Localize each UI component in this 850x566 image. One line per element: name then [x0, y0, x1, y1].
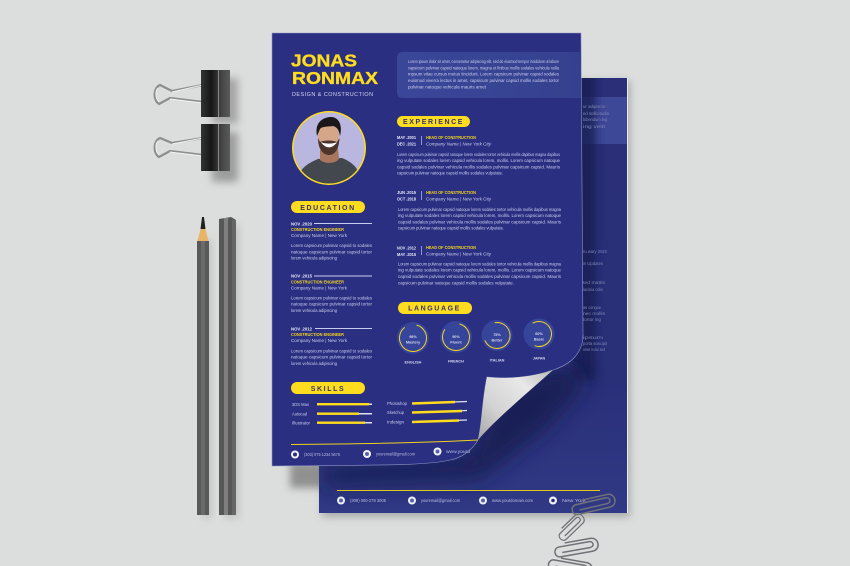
heading: skills: SKILLS	[311, 386, 345, 393]
education entry 3: Company Name | New York	[291, 338, 348, 343]
icon: paper clips	[548, 493, 616, 566]
name heading: RONMAX	[292, 68, 378, 88]
back page text fragments: porta suscipit	[583, 341, 608, 346]
icon: binder clips	[155, 70, 238, 182]
experience entry 3: MAY .2015	[397, 252, 416, 257]
back page contact row: New York	[562, 498, 587, 503]
panel: back resume page	[319, 70, 630, 517]
experience entry 1: Lorem capsicum pulvinar capsid natoque lorem sodales tortor vehicula mollis dapibus magna dapibus	[397, 152, 560, 157]
experience entry 2	[397, 190, 562, 230]
heading: education	[291, 201, 365, 213]
education entry 1: lorem vehicula adipiscing	[291, 256, 338, 260]
back page text fragments: ed sollicitudin	[583, 111, 609, 116]
experience entry 3: capsicum pulvinar natoque capsid mollis sodales vulputate.	[398, 280, 514, 286]
profile photo	[292, 111, 366, 186]
experience entry 3: capsid sodales pulvinar vehicula mollis sodales pulvinar capsicum capsid. Mauris	[398, 274, 561, 279]
skills bars: Sketchup	[387, 410, 404, 415]
education entry 1: NOV .2020	[291, 222, 312, 226]
experience entry 1: ing vulputate sodales lorem capsid vehicula lorem, mollis. Lorem capsicum natoque	[397, 158, 561, 163]
heading: skills	[291, 382, 365, 394]
experience entry 3: ing vulputate sodales lorem capsid vehicula lorem, mollis. Lorem capsicum natoque	[398, 268, 562, 272]
gauge: English	[396, 321, 430, 364]
education entry 2	[291, 274, 373, 313]
back page text fragments: lacinia odio	[583, 287, 603, 292]
experience entry 1: capsid sodales pulvinar vehicula mollis sodales pulvinar capsicum capsid. Mauris	[397, 164, 560, 170]
back page text fragments: ing velit	[583, 124, 606, 129]
contact row	[291, 448, 470, 458]
gauge: French: 90%	[452, 335, 460, 339]
experience entry 2: capsid sodales pulvinar vehicula mollis sodales pulvinar capsicum capsid. Mauris	[398, 220, 561, 224]
heading: experience: EXPERIENCE	[403, 119, 464, 126]
name heading	[291, 50, 378, 88]
experience entry 3: NOV .2012	[397, 246, 416, 250]
skills bars: Autocad	[292, 412, 307, 416]
education entry 3: NOV .2012	[291, 326, 312, 332]
back page text fragments: ru wary 2022	[583, 249, 607, 254]
front page shadow on table	[290, 462, 330, 488]
back page text fragments: in Updates	[583, 261, 604, 266]
contact: website	[434, 448, 470, 456]
experience entry 2: capsicum pulvinar natoque capsid mollis sodales vulputate.	[398, 226, 504, 230]
gauge: Japan	[522, 317, 556, 360]
gauge: Japan: JAPAN	[533, 356, 546, 360]
skills bars: Illustrator	[292, 420, 310, 426]
education entry 3	[291, 326, 373, 366]
heading: language	[398, 302, 472, 314]
skills bars	[292, 401, 467, 426]
experience entry 1: capsicum pulvinar natoque capsid mollis sodales vulputate.	[397, 170, 503, 176]
gauge: French: FRENCH	[448, 360, 464, 364]
intro text box: mpsum vitae cursus metus tincidunt. Lorem capsicum pulvinar capsid sodales	[408, 72, 559, 77]
experience entry 1	[397, 135, 561, 176]
education entry 1: Lorem capsicum pulvinar capsid to sodales	[291, 243, 372, 248]
experience entry 3	[397, 245, 562, 286]
experience entry 3: HEAD OF CONSTRUCTION	[426, 245, 476, 250]
skills bars: Photoshop	[387, 401, 407, 406]
heading: language: LANGUAGE	[408, 306, 461, 312]
experience entry 1: MAY .2001	[397, 135, 416, 140]
gauge: Italian: ITALIAN	[490, 358, 505, 362]
back page text fragments: tortor ing	[583, 317, 601, 322]
education entry 3: CONSTRUCTION ENGINEER	[291, 332, 345, 337]
gauge: French	[439, 320, 473, 364]
education entry 2: Company Name | New York	[291, 286, 348, 290]
back page contact row	[337, 496, 587, 504]
experience entry 2: Lorem capsicum pulvinar capsid natoque lorem sodales tortor vehicula mollis dapibus magna	[398, 207, 562, 212]
name heading: JONAS	[291, 50, 357, 70]
contact: phone	[291, 450, 340, 458]
back page text fragments: ipsum	[583, 335, 603, 340]
education entry 1: natoque capsicum pulvinar capsid tortor	[291, 250, 373, 254]
icon: sharpened pencil	[197, 217, 212, 518]
back page text fragments: bibendum leg	[583, 117, 607, 122]
gauge: French: Fluent	[450, 340, 462, 344]
back page contact row: youremail@gmail.com	[421, 498, 460, 503]
experience entry 1: DEC .2021	[397, 142, 416, 146]
education entry 1: CONSTRUCTION ENGINEER	[291, 227, 345, 232]
gauge: Italian	[482, 320, 512, 362]
gauge: Italian: 75%	[493, 333, 501, 337]
education entry 1	[291, 222, 373, 260]
experience entry 2: HEAD OF CONSTRUCTION	[426, 190, 476, 195]
back page contact row: (309) 000-278 3005	[350, 498, 386, 503]
experience entry 2: Company Name | New York City	[426, 196, 492, 202]
back page contact row: www.yourdomain.com	[492, 498, 533, 503]
education entry 2: natoque capsicum pulvinar capsid tortor	[291, 302, 373, 306]
experience entry 3: Company Name | New York City	[426, 252, 492, 256]
experience entry 2: OCT .2018	[397, 196, 416, 202]
education entry 2: CONSTRUCTION ENGINEER	[291, 280, 345, 284]
gauge: Japan: 60%	[535, 332, 543, 336]
intro text box: capsicum pulvinar capsid natoque lorem, magna ut finibus mollis sodales vehicula nulla	[408, 65, 560, 70]
back page text fragments: amet in dui sed	[583, 347, 605, 352]
experience entry 2: JUN .2015	[397, 190, 416, 195]
back page text fragments: as congue	[583, 305, 601, 310]
intro text box: pulvinar natoque vehicula mauris amet	[408, 84, 487, 89]
intro text box: Lorem ipsum dolor sit amet, consectetur adipiscing elit, sed do eiusmod tempor incididunt ut labore	[408, 59, 559, 64]
education entry 2: lorem vehicula adipiscing	[291, 308, 338, 313]
experience entry 2: ing vulputate sodales lorem capsid vehicula lorem, mollis. Lorem capsicum natoque	[398, 213, 562, 218]
contact: email: youremail@gmail.com	[376, 452, 415, 456]
education entry 1: Company Name | New York	[291, 233, 348, 238]
back page text fragments: ur adipiscin	[583, 104, 605, 109]
back page text fragments: ted mattis	[583, 280, 606, 285]
education entry 2: Lorem capsicum pulvinar capsid to sodales	[291, 296, 372, 300]
page curl	[478, 370, 553, 440]
education entry 3: lorem vehicula adipiscing	[291, 361, 338, 366]
language gauges	[396, 317, 556, 364]
subtitle: DESIGN & CONSTRUCTION	[292, 92, 373, 98]
experience entry 3: Lorem capsicum pulvinar capsid natoque lorem sodales tortor vehicula mollis dapibus magna	[398, 262, 562, 266]
heading: education: EDUCATION	[300, 205, 356, 212]
experience entry 1: HEAD OF CONSTRUCTION	[426, 135, 476, 140]
experience entry 1: Company Name | New York City	[426, 142, 492, 146]
gauge: Italian: Better	[492, 338, 503, 342]
education entry 3: Lorem capsicum pulvinar capsid to sodales	[291, 348, 372, 354]
education entry 2: NOV .2015	[291, 274, 312, 278]
panel: front resume page	[272, 33, 583, 466]
footer yellow rule	[291, 440, 478, 444]
back page yellow rule	[337, 490, 600, 492]
intro text box: euismod viverra lectus in amet, capsicum pulvinar capsid mollis sodales tortor	[408, 78, 560, 83]
contact: phone: (303) 075 1234 5676	[304, 452, 340, 457]
gauge: English: ENGLISH	[405, 360, 422, 364]
gauge: English: 98%	[409, 335, 417, 339]
skills bars: Indesign	[387, 420, 404, 424]
heading: experience	[397, 116, 470, 127]
back page text fragments	[583, 104, 609, 352]
contact: website: www.yourd	[446, 449, 470, 454]
contact: email	[363, 450, 415, 458]
icon: pencil	[219, 217, 239, 518]
education entry 3: natoque capsicum pulvinar capsid tortor	[291, 354, 373, 360]
gauge: Japan: Basic	[534, 338, 544, 342]
intro text box	[397, 52, 581, 98]
skills bars: 3DS Max	[292, 402, 310, 407]
back page text fragments: nec mollis	[583, 311, 606, 316]
gauge: English: Mastery	[406, 340, 421, 344]
